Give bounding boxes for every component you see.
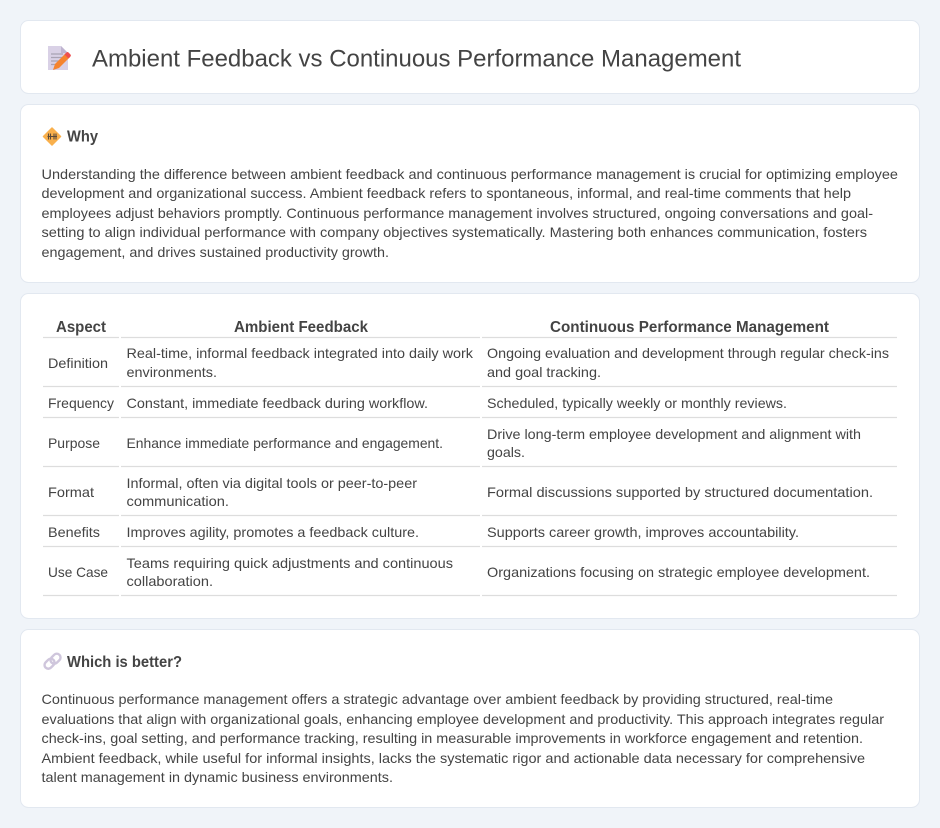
panel: title header [20, 20, 920, 94]
panel: which is better [20, 630, 920, 808]
table row: frequency: Constant, immediate feedback during workflow. [126, 395, 428, 411]
table header row [56, 319, 829, 336]
title: Ambient Feedback vs Continuous Performance Management [92, 46, 741, 72]
table row: benefits [48, 524, 799, 540]
table header row: Continuous Performance Management [550, 319, 829, 336]
panel: comparison table [20, 294, 920, 618]
text block: which is better paragraph: talent management in dynamic business environments. [42, 769, 393, 785]
table row: format: Formal discussions supported by structured documentation. [487, 484, 873, 500]
panel: why [20, 104, 920, 282]
table row: format: Informal, often via digital tools or peer-to-peer [126, 475, 417, 491]
table row: purpose: goals. [487, 444, 525, 460]
table row: definition: Ongoing evaluation and development through regular check-ins [487, 345, 889, 361]
table row: frequency: Frequency [48, 395, 114, 411]
table row: use case [48, 555, 870, 589]
text block: which is better paragraph: Continuous performance management offers a strategic advantage over ambient feedback by providing structured, real-time [42, 691, 833, 707]
heading: why: Why [67, 128, 98, 146]
table row: benefits: Improves agility, promotes a feedback culture. [126, 524, 419, 540]
text block: which is better paragraph [42, 691, 884, 785]
table header row: Aspect [56, 319, 106, 336]
table row: format [48, 475, 873, 509]
table row: purpose: Purpose [48, 435, 100, 451]
text block: why paragraph: setting to align individual performance with company objectives systematically. Mastering both enhances communication, fosters [42, 224, 867, 240]
text block: why paragraph: employees adjust behaviors promptly. Continuous performance management involves structured, ongoing conversations and goal- [42, 205, 873, 221]
table row: definition [48, 345, 889, 380]
text block: which is better paragraph: evaluations that align with organizational goals, enhancing employee development and productivity. This approach integrates regular [42, 711, 884, 727]
text block: why paragraph [42, 166, 898, 260]
icon: chain link [43, 652, 62, 670]
table header row: Ambient Feedback [234, 319, 368, 336]
table row: purpose [48, 426, 861, 460]
table row: definition: and goal tracking. [487, 364, 601, 380]
table row: format: communication. [126, 493, 229, 509]
table row: benefits: Supports career growth, improves accountability. [487, 524, 799, 540]
text block: why paragraph: Understanding the difference between ambient feedback and continuous performance management is crucial for optimizing employee [42, 166, 898, 182]
table row: definition: Definition [48, 355, 108, 371]
table row: benefits: Benefits [48, 524, 100, 540]
table row: use case: Use Case [48, 564, 108, 580]
table row: purpose: Enhance immediate performance and engagement. [126, 435, 443, 451]
table row: frequency [48, 395, 787, 411]
table row: format: Format [48, 484, 94, 500]
text block: which is better paragraph: check-ins, goal setting, and performance tracking, resulting in measurable improvements in workforce engagement and retention. [42, 730, 863, 746]
icon: orange diamond sign [44, 128, 60, 145]
table row: definition: environments. [126, 364, 217, 380]
icon: document with pencil [48, 46, 71, 70]
heading: which is better: Which is better? [67, 654, 182, 671]
text block: why paragraph: engagement, and drives sustained productivity growth. [42, 244, 389, 260]
table row: definition: Real-time, informal feedback integrated into daily work [126, 345, 474, 361]
table row: frequency: Scheduled, typically weekly or monthly reviews. [487, 395, 787, 411]
table row: use case: collaboration. [126, 573, 213, 589]
text block: why paragraph: development and organizational success. Ambient feedback refers to spontaneous, informal, and real-time comments that help [42, 185, 851, 201]
table row: purpose: Drive long-term employee development and alignment with [487, 426, 861, 442]
text block: which is better paragraph: Ambient feedback, while useful for informal insights, lacks the systematic rigor and actionable data necessary for comprehensive [42, 750, 865, 766]
table row: use case: Organizations focusing on strategic employee development. [487, 564, 870, 580]
table row: use case: Teams requiring quick adjustments and continuous [126, 555, 453, 571]
